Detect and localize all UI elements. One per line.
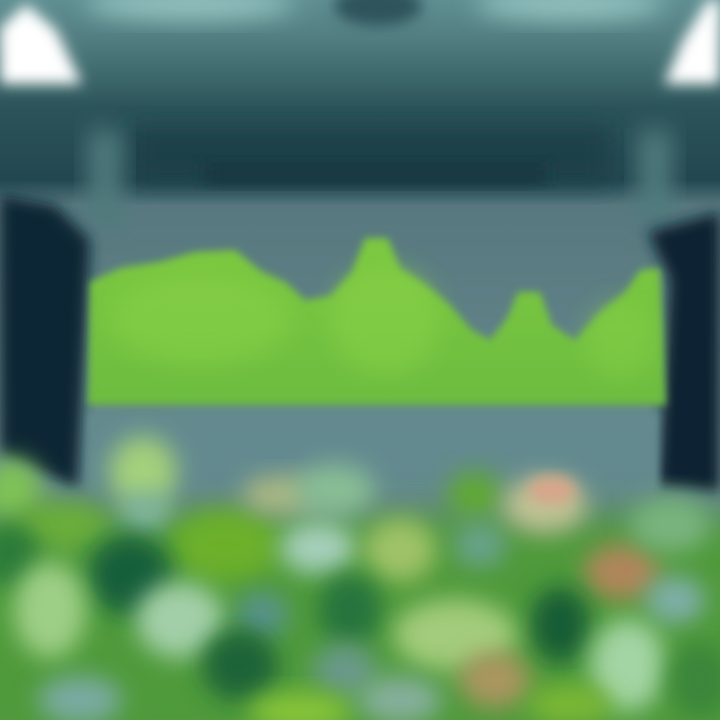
area chart: green silhouette: [88, 238, 666, 405]
lower wall panel: [88, 412, 658, 492]
left dark pillar: [0, 195, 90, 488]
foliage: blurred leaves and fruit: [0, 436, 720, 720]
ceiling: top light panels and dark band: [85, 0, 672, 225]
icon: right corner light: [664, 0, 720, 84]
icon: left corner light: [0, 4, 82, 84]
right dark pillar: [648, 212, 720, 492]
